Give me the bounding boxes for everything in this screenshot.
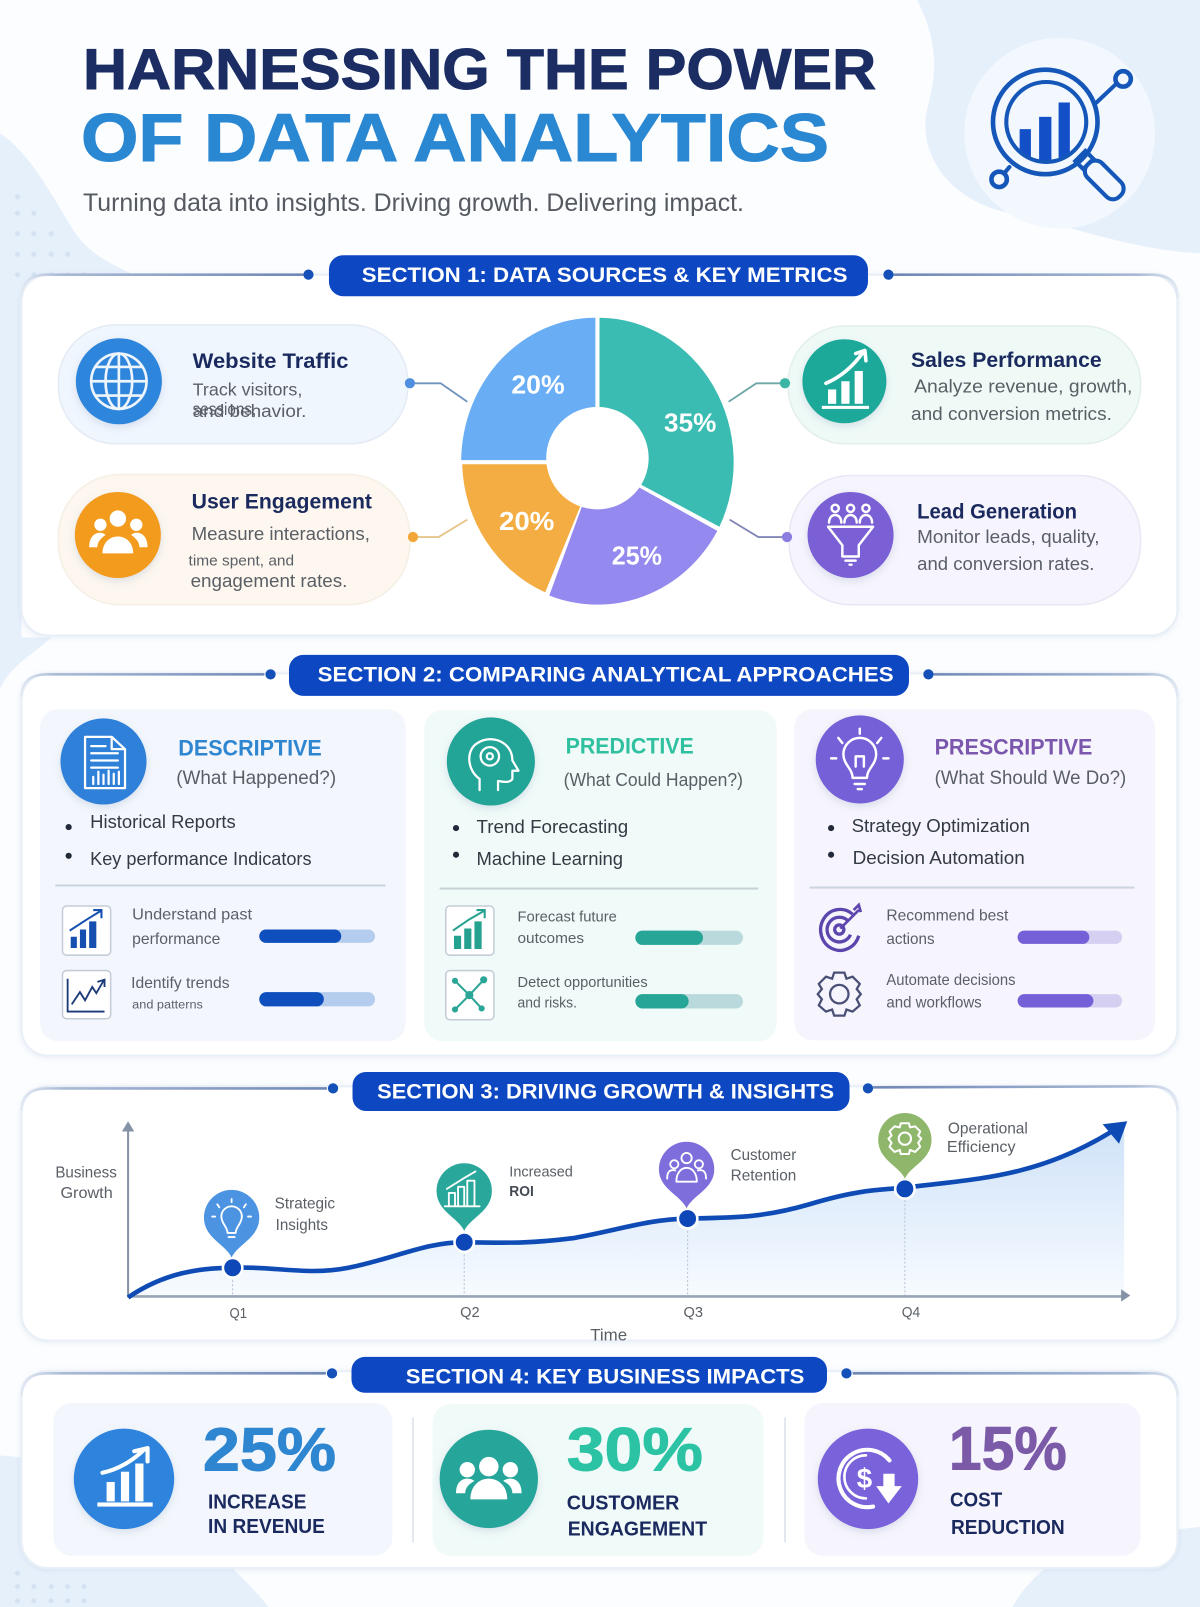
panel: predictive: Forecast future <box>518 909 617 925</box>
stat: 30% customer engagement: 30% <box>567 1416 703 1485</box>
milestone: increased ROI: Increased <box>509 1165 573 1181</box>
icon: network nodes <box>446 971 494 1020</box>
donut chart: 25% <box>612 543 662 571</box>
panel: predictive: (What Could Happen?) <box>564 769 743 790</box>
panel: descriptive: (What Happened?) <box>176 767 336 789</box>
card: sales performance <box>788 326 1141 444</box>
line chart: business growth over time: Q4 <box>902 1305 920 1321</box>
panel: prescriptive: Automate decisions <box>886 972 1016 989</box>
card: website traffic <box>58 325 408 444</box>
donut chart: 35% <box>664 409 717 437</box>
progress bar <box>1018 931 1122 944</box>
card: user engagement: Measure interactions, <box>192 523 370 544</box>
panel: predictive <box>424 710 777 1041</box>
donut chart: 20% <box>511 372 565 400</box>
connector: sales performance <box>729 378 790 402</box>
card: sales performance: Analyze revenue, growth, <box>914 376 1132 397</box>
section 2 heading: SECTION 2: COMPARING ANALYTICAL APPROACHES <box>318 663 894 687</box>
icon: lightbulb <box>816 715 904 804</box>
section 2 heading <box>289 655 909 696</box>
section 1 heading: SECTION 1: DATA SOURCES & KEY METRICS <box>362 263 847 287</box>
panel: section 4 <box>22 1368 1177 1568</box>
card: user engagement <box>58 475 410 605</box>
card: user engagement: engagement rates. <box>191 570 347 591</box>
panel: section 1 <box>22 270 1177 635</box>
section 1 heading <box>329 255 868 296</box>
panel: descriptive: Key performance Indicators <box>90 848 312 869</box>
icon: teal bars <box>446 906 494 955</box>
icon: magnifier with bar chart <box>964 38 1155 229</box>
card: sales performance: and conversion metrics. <box>911 403 1112 424</box>
card: lead generation <box>789 476 1141 605</box>
icon: line trend <box>63 971 111 1019</box>
panel: predictive: outcomes <box>518 931 584 947</box>
line chart: business growth over time: Q1 <box>230 1306 247 1322</box>
connector: website traffic <box>405 378 467 402</box>
line chart: business growth over time: Growth <box>60 1185 113 1202</box>
milestone: strategic insights <box>204 1190 335 1258</box>
subtitle: Turning data into insights. Driving growth. Delivering impact. <box>83 190 744 217</box>
stat: 25% increase in revenue: INCREASE <box>208 1491 306 1514</box>
panel: section 3 <box>22 1083 1177 1341</box>
connector: user engagement <box>408 520 467 542</box>
panel: descriptive: and patterns <box>132 997 203 1011</box>
card: lead generation: Monitor leads, quality, <box>917 526 1100 547</box>
panel: predictive: PREDICTIVE <box>566 733 694 758</box>
progress bar <box>259 930 375 943</box>
card: website traffic: Website Traffic <box>193 349 348 373</box>
panel: predictive: Trend Forecasting <box>477 816 628 837</box>
stat: 25% increase in revenue <box>53 1403 392 1556</box>
panel: prescriptive <box>794 709 1155 1040</box>
stat: 30% customer engagement: CUSTOMER <box>567 1492 680 1515</box>
progress bar <box>259 992 375 1006</box>
panel: prescriptive: Recommend best <box>886 907 1009 924</box>
stat: 15% cost reduction: REDUCTION <box>951 1516 1065 1539</box>
line chart: business growth over time <box>55 1121 1130 1345</box>
panel: prescriptive: PRESCRIPTIVE <box>935 734 1092 759</box>
stat: 30% customer engagement <box>432 1404 763 1556</box>
stat: 15% cost reduction <box>804 1403 1141 1556</box>
section 4 heading <box>351 1357 827 1393</box>
milestone: customer retention: Customer <box>731 1147 796 1164</box>
panel: predictive: and risks. <box>518 995 577 1011</box>
panel: prescriptive: Strategy Optimization <box>852 815 1030 836</box>
panel: descriptive: DESCRIPTIVE <box>178 735 322 760</box>
decorative dots <box>15 194 87 1603</box>
panel: descriptive: performance <box>132 931 220 948</box>
section 3 heading: SECTION 3: DRIVING GROWTH & INSIGHTS <box>377 1080 834 1104</box>
panel: prescriptive: and workflows <box>886 994 982 1011</box>
milestone: operational efficiency <box>878 1113 1028 1179</box>
progress bar <box>635 931 743 945</box>
milestone: increased ROI <box>437 1163 573 1231</box>
panel: prescriptive: (What Should We Do?) <box>935 768 1126 789</box>
panel: prescriptive: Decision Automation <box>853 847 1025 868</box>
card: sales performance: Sales Performance <box>911 348 1102 372</box>
panel: descriptive: Historical Reports <box>90 811 236 832</box>
connector: lead generation <box>730 520 792 542</box>
icon: report document <box>60 718 147 805</box>
stat: 25% increase in revenue: 25% <box>203 1416 336 1485</box>
icon: gear <box>818 973 861 1016</box>
panel: predictive: Machine Learning <box>477 848 623 869</box>
card: user engagement: time spent, and <box>189 554 294 570</box>
stat: 15% cost reduction: COST <box>950 1489 1003 1512</box>
line chart: business growth over time: Time <box>590 1327 627 1345</box>
stat: 15% cost reduction: 15% <box>949 1415 1067 1484</box>
section 3 heading <box>353 1072 850 1111</box>
donut chart: 20% <box>499 508 555 536</box>
line chart: business growth over time: Business <box>55 1165 117 1182</box>
icon: head with gear <box>447 717 535 806</box>
panel: descriptive: Understand past <box>132 906 253 923</box>
milestone: strategic insights: Strategic <box>275 1195 335 1212</box>
milestone: customer retention: Retention <box>731 1168 796 1185</box>
milestone: increased ROI: ROI <box>509 1184 534 1200</box>
card: lead generation: Lead Generation <box>917 500 1077 524</box>
panel: descriptive <box>40 709 406 1041</box>
donut chart <box>461 318 734 605</box>
stat: 30% customer engagement: ENGAGEMENT <box>568 1517 708 1540</box>
line chart: business growth over time: Q3 <box>684 1305 703 1321</box>
milestone: customer retention <box>659 1142 796 1208</box>
icon: bar growth <box>63 906 111 955</box>
card: user engagement: User Engagement <box>192 489 372 513</box>
stat: 15% cost reduction: $ <box>857 1463 872 1494</box>
panel: prescriptive: actions <box>886 931 935 948</box>
milestone: operational efficiency: Operational <box>948 1121 1028 1138</box>
icon: target <box>821 905 861 950</box>
panel: section 2 <box>22 669 1177 1056</box>
panel: descriptive: Identify trends <box>131 975 230 992</box>
panel: predictive: Detect opportunities <box>518 975 648 991</box>
card: website traffic: sessions, <box>193 399 256 419</box>
card: website traffic: Track visitors, <box>193 380 302 400</box>
card: website traffic: and behavior. <box>193 401 306 421</box>
stat: 25% increase in revenue: IN REVENUE <box>208 1515 325 1538</box>
milestone: operational efficiency: Efficiency <box>947 1139 1016 1156</box>
card: lead generation: and conversion rates. <box>917 553 1094 574</box>
milestone: strategic insights: Insights <box>276 1217 328 1234</box>
line chart: business growth over time: Q2 <box>460 1305 480 1321</box>
progress bar <box>635 994 743 1008</box>
section 4 heading: SECTION 4: KEY BUSINESS IMPACTS <box>406 1365 804 1389</box>
progress bar <box>1018 994 1122 1007</box>
title: OF DATA ANALYTICS <box>81 101 829 176</box>
title: HARNESSING THE POWER <box>83 38 876 102</box>
title <box>81 38 876 176</box>
